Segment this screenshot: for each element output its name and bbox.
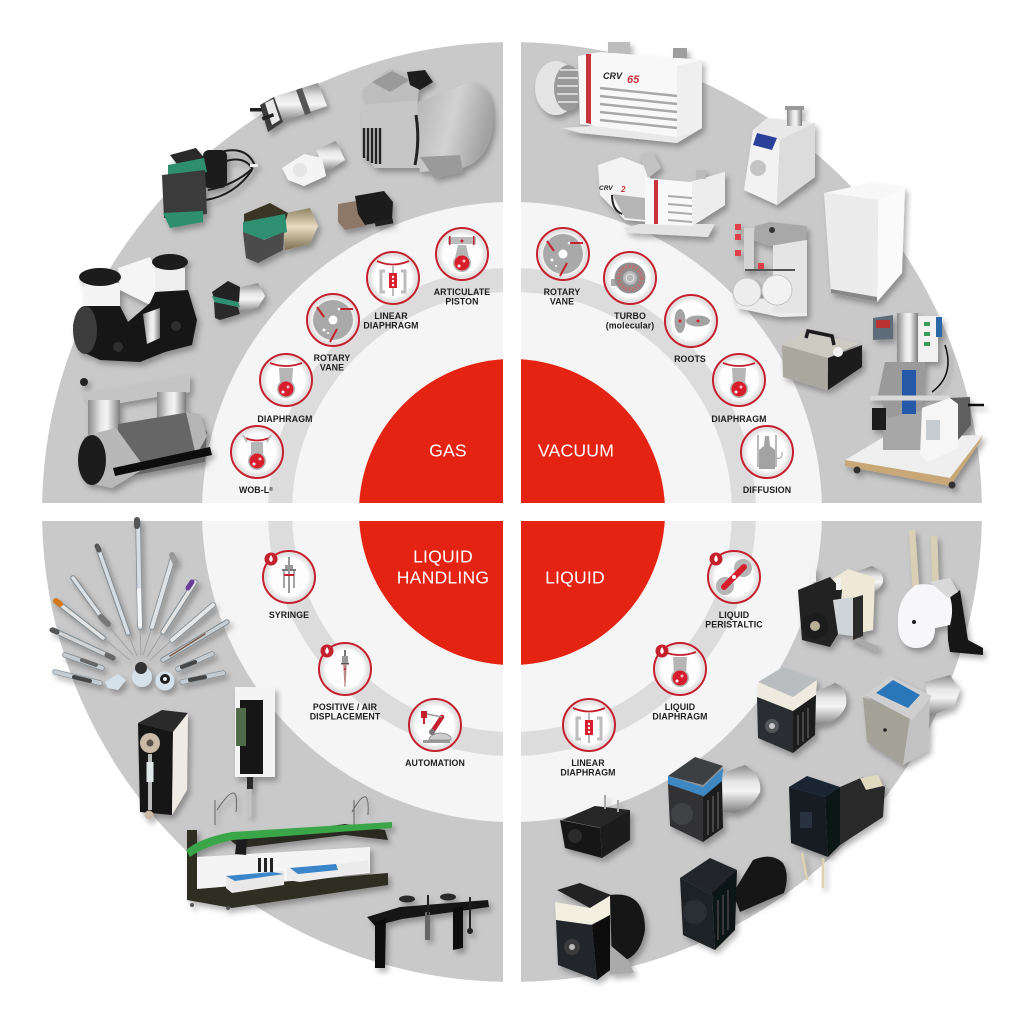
icon: liquid diaphragm	[654, 643, 706, 695]
product: CRV pro 2 rotary vane pump: 2	[620, 185, 626, 194]
label: rotary vane: VANE	[550, 297, 574, 307]
label: articulate piston: ARTICULATE	[434, 287, 490, 297]
label: syringe: SYRINGE	[269, 610, 309, 620]
panel: vacuum quadrant	[521, 42, 988, 503]
product: CRV pro 2 rotary vane pump: CRV	[599, 185, 613, 192]
product: large grey motor compressor	[362, 68, 493, 178]
label: WOB-L: ®	[269, 486, 273, 493]
label: roots: ROOTS	[674, 354, 706, 364]
product: CRV pro 65 rotary vane pump: 65	[627, 74, 640, 86]
heading: LIQUID HANDLING: LIQUID	[413, 546, 473, 566]
product: glass flask vacuum system	[733, 222, 807, 317]
product: metal pump with blue top	[863, 675, 960, 765]
panel: liquid quadrant	[521, 521, 989, 986]
heading: LIQUID: LIQUID	[545, 568, 605, 588]
label: rotary vane: ROTARY	[314, 353, 350, 363]
icon: turbo molecular	[604, 252, 656, 304]
label: liquid diaphragm: DIAPHRAGM	[652, 712, 708, 722]
product: brown and black solenoid pump	[338, 191, 393, 230]
product: automated liquid handling workstation	[186, 793, 392, 910]
icon: positive air displacement pipette	[319, 643, 371, 695]
label: automation: AUTOMATION	[405, 758, 465, 768]
label: linear diaphragm: LINEAR	[374, 311, 408, 321]
label: linear diaphragm: LINEAR	[571, 758, 605, 768]
label: turbo molecular: TURBO	[614, 311, 646, 321]
icon: rotary vane	[537, 228, 589, 280]
vacuum quadrant background rings	[521, 42, 982, 503]
label: liquid peristaltic: PERISTALTIC	[705, 620, 763, 630]
product: pump with blue band	[668, 757, 760, 842]
product: pipetting head	[235, 687, 275, 817]
label: turbo molecular: (molecular)	[606, 321, 654, 331]
product: CRV pro 65 rotary vane pump: CRV	[603, 71, 623, 81]
product: syringe pump module	[138, 710, 188, 820]
product: grey diaphragm vacuum pump	[782, 331, 862, 390]
product: black and green pump with wires	[162, 148, 258, 228]
product: white peristaltic pump	[898, 530, 983, 655]
liquid handling quadrant background rings	[42, 521, 503, 982]
icon: articulate piston	[436, 228, 488, 280]
product: black robotic gantry arm	[367, 894, 489, 968]
gas quadrant background rings	[42, 42, 503, 503]
label: positive air displacement: DISPLACEMENT	[310, 712, 381, 722]
label: diaphragm: DIAPHRAGM	[257, 414, 313, 424]
product: white box turbo pump	[744, 106, 815, 205]
label: liquid diaphragm: LIQUID	[665, 702, 695, 712]
label: diaphragm: DIAPHRAGM	[711, 414, 767, 424]
product: twin head black pump	[73, 254, 197, 362]
product: CRV pro 2 rotary vane pump	[598, 151, 725, 237]
product: silver twin cylinder compressor	[78, 374, 212, 488]
label: rotary vane: ROTARY	[544, 287, 580, 297]
product: vacuum rig on wheeled base	[845, 313, 984, 488]
product: black box stepper pump	[789, 775, 885, 888]
label: rotary vane: VANE	[320, 363, 344, 373]
liquid quadrant background rings	[521, 521, 982, 982]
product: black peristaltic pump	[798, 566, 883, 651]
product: small black pump	[560, 795, 630, 858]
product: tall white cabinet	[824, 183, 905, 302]
product: syringe fan	[52, 520, 227, 683]
icon: roots	[665, 295, 717, 347]
icon: diaphragm	[260, 354, 312, 406]
product: small silver motor pump	[250, 83, 327, 132]
heading: VACUUM: VACUUM	[538, 440, 614, 460]
icon: linear diaphragm	[367, 252, 419, 304]
product: gold motor green band pump	[243, 203, 318, 263]
product: syringe knobs	[105, 662, 174, 690]
label: positive air displacement: POSITIVE / AIR	[313, 702, 377, 712]
label: WOB-L: WOB-L	[239, 485, 269, 495]
icon: linear diaphragm	[563, 699, 615, 751]
product: white plastic small pump	[282, 141, 345, 186]
label: linear diaphragm: DIAPHRAGM	[363, 321, 419, 331]
product: small silver and green pump	[212, 281, 265, 320]
icon: WOB-L	[231, 426, 283, 478]
heading: LIQUID HANDLING: HANDLING	[397, 568, 489, 588]
label: linear diaphragm: DIAPHRAGM	[560, 768, 616, 778]
product: diaphragm pump with metal head	[757, 667, 846, 753]
label: diffusion: DIFFUSION	[743, 485, 791, 495]
icon: syringe	[263, 551, 315, 603]
panel: gas quadrant	[42, 42, 503, 503]
heading: GAS: GAS	[429, 440, 467, 460]
icon: liquid peristaltic	[708, 551, 760, 603]
icon: diaphragm	[713, 354, 765, 406]
panel: liquid handling quadrant	[42, 517, 503, 982]
label: liquid peristaltic: LIQUID	[719, 610, 749, 620]
product: black motor pump	[680, 857, 787, 950]
product: white band black pump	[555, 883, 645, 980]
icon: rotary vane	[307, 294, 359, 346]
icon: diffusion	[741, 426, 793, 478]
icon: automation robot arm	[409, 699, 461, 751]
product: CRV pro 65 rotary vane pump	[535, 42, 702, 143]
label: articulate piston: PISTON	[445, 297, 479, 307]
